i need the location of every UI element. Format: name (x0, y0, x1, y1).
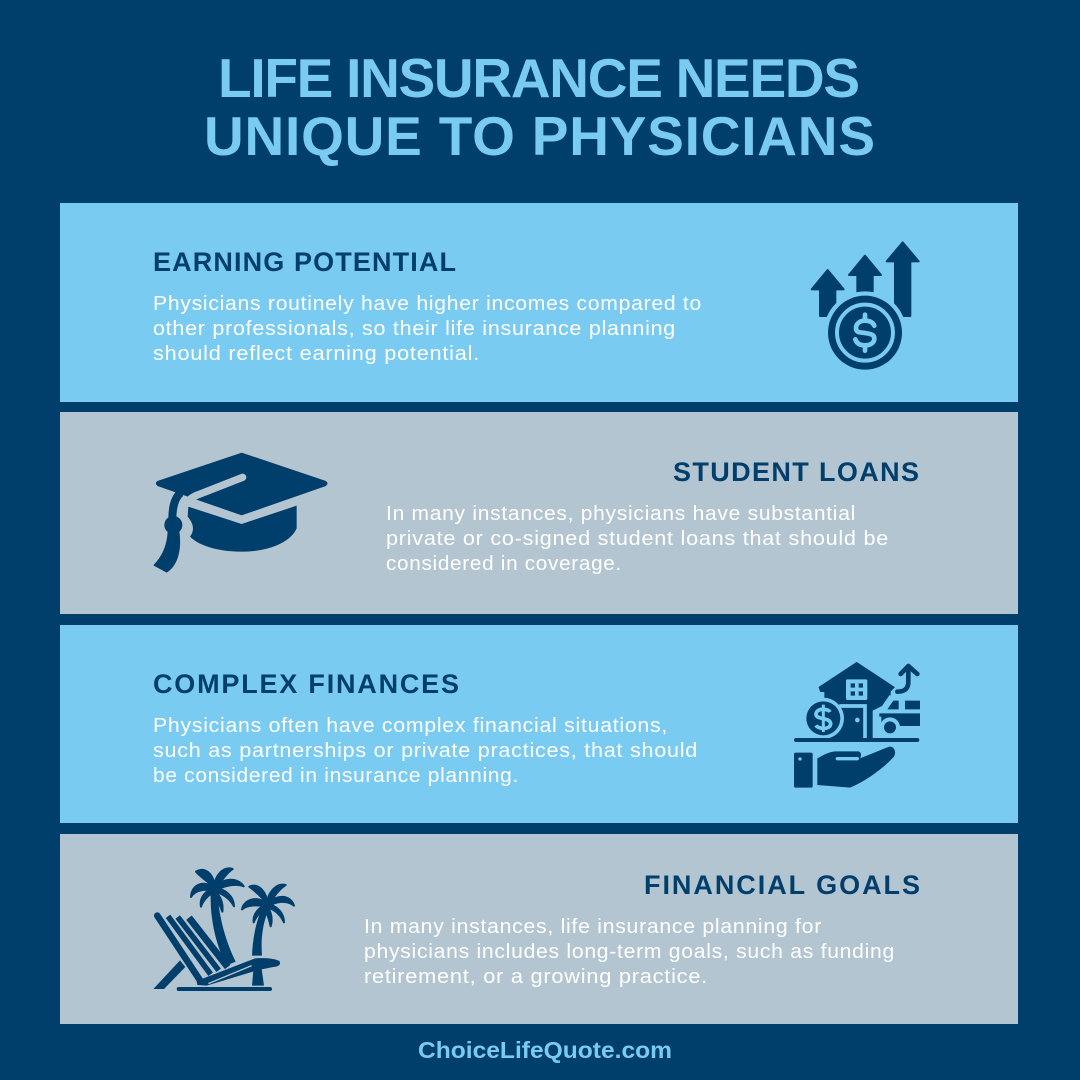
text block: complex finances: be considered in insurance planning. (153, 765, 519, 787)
panel: student loans (60, 412, 1018, 614)
text block: complex finances: Physicians often have complex financial situations, (153, 715, 668, 737)
text block: earning potential: should reflect earning potential. (153, 343, 480, 365)
text block: earning potential (153, 293, 702, 365)
text block: financial goals (364, 916, 895, 988)
text block: student loans: private or co-signed student loans that should be (386, 528, 889, 550)
heading: student loans: STUDENT LOANS (673, 457, 919, 487)
text block: student loans: In many instances, physicians have substantial (386, 503, 856, 525)
panel: complex finances (60, 625, 1018, 823)
footer: website: ChoiceLifeQuote.com (418, 1037, 672, 1063)
panel: earning potential (60, 203, 1018, 402)
title: LIFE INSURANCE NEEDS (218, 47, 860, 109)
title: UNIQUE TO PHYSICIANS (204, 105, 875, 167)
heading: earning potential: EARNING POTENTIAL (153, 247, 456, 277)
icon: beach chair and palm trees (153, 868, 294, 989)
title (204, 47, 875, 167)
icon: graduation cap (153, 453, 327, 573)
text block: student loans (386, 503, 889, 575)
text block: financial goals: retirement, or a growing practice. (364, 966, 708, 988)
text block: financial goals: In many instances, life insurance planning for (364, 916, 822, 938)
heading: complex finances: COMPLEX FINANCES (153, 669, 459, 699)
icon: rising arrows and dollar coin (812, 242, 919, 374)
text block: financial goals: physicians includes long-term goals, such as funding (364, 941, 895, 963)
text block: complex finances (153, 715, 698, 787)
icon: hand holding house, car and money (794, 663, 922, 788)
panel: financial goals (60, 834, 1018, 1024)
text block: complex finances: such as partnerships or private practices, that should (153, 740, 698, 762)
heading: financial goals: FINANCIAL GOALS (644, 870, 920, 900)
text block: student loans: considered in coverage. (386, 553, 622, 575)
text block: earning potential: other professionals, so their life insurance planning (153, 318, 676, 340)
text block: earning potential: Physicians routinely have higher incomes compared to (153, 293, 702, 315)
